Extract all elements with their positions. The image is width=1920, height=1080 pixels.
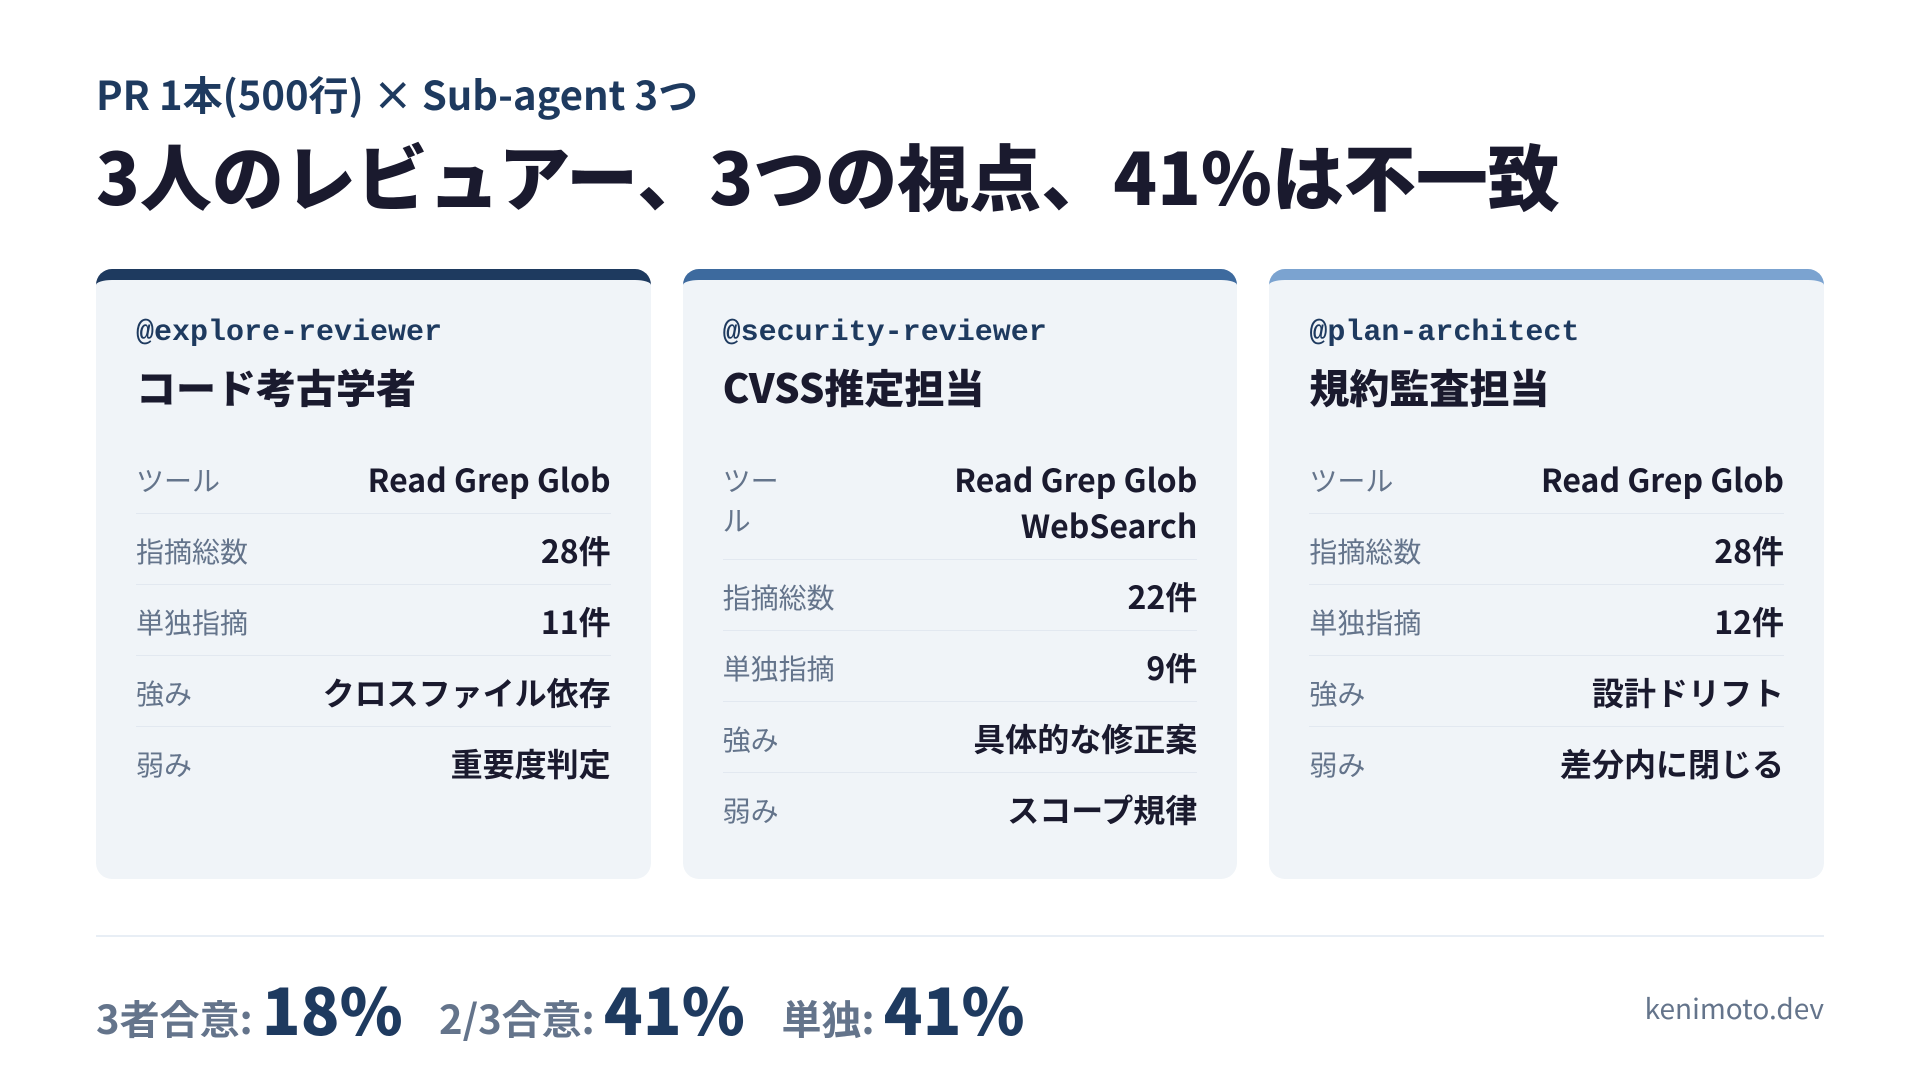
row: weakness bbox=[136, 740, 611, 786]
row: tools: Read Grep Glob bbox=[1541, 456, 1784, 502]
row: solo findings: 11件 bbox=[541, 598, 611, 644]
row: weakness: 重要度判定 bbox=[451, 740, 611, 786]
row: strength: クロスファイル依存 bbox=[323, 669, 611, 715]
row: tools bbox=[1309, 443, 1784, 514]
stat: solo: 単独: 41% bbox=[782, 962, 1025, 1054]
role heading: CVSS推定担当 bbox=[723, 357, 984, 415]
agent handle: @security-reviewer bbox=[723, 316, 1047, 350]
panel: plan-architect bbox=[1269, 269, 1824, 879]
agent handle: @explore-reviewer bbox=[136, 316, 442, 350]
row: solo findings bbox=[723, 631, 1197, 702]
row: solo findings: 単独指摘 bbox=[723, 648, 835, 688]
row: tools: Read Grep Glob bbox=[954, 456, 1197, 502]
row: solo findings: 単独指摘 bbox=[1309, 602, 1421, 642]
row: total findings: 指摘総数 bbox=[1309, 531, 1421, 571]
agent handle: @plan-architect bbox=[1309, 316, 1579, 350]
row: total findings: 28件 bbox=[541, 527, 611, 573]
row: total findings bbox=[136, 514, 611, 585]
row: tools: WebSearch bbox=[1021, 502, 1197, 548]
row: strength: 強み bbox=[723, 719, 779, 759]
row: total findings: 指摘総数 bbox=[723, 577, 835, 617]
row: weakness: 弱み bbox=[1309, 744, 1365, 784]
title: 3人のレビュアー、3つの視点、41%は不一致 bbox=[96, 121, 1560, 226]
stat: two of three agreement: 2/3合意: 41% bbox=[439, 962, 745, 1054]
row: solo findings: 9件 bbox=[1146, 644, 1197, 690]
row: weakness: 弱み bbox=[723, 790, 779, 830]
row: strength: 具体的な修正案 bbox=[973, 715, 1197, 761]
row: strength bbox=[723, 702, 1197, 773]
row: total findings: 指摘総数 bbox=[136, 531, 248, 571]
row: strength: 強み bbox=[1309, 673, 1365, 713]
row: weakness: 差分内に閉じる bbox=[1560, 740, 1784, 786]
row: strength: 設計ドリフト bbox=[1592, 669, 1784, 715]
row: strength bbox=[136, 656, 611, 727]
row: total findings: 28件 bbox=[1714, 527, 1784, 573]
row: tools: Read Grep Glob bbox=[368, 456, 611, 502]
row: solo findings bbox=[1309, 585, 1784, 656]
row: solo findings bbox=[136, 585, 611, 656]
panel: security-reviewer bbox=[683, 269, 1237, 879]
row: tools: ツール bbox=[723, 460, 779, 540]
row: tools bbox=[723, 443, 1197, 560]
subtitle: PR 1本(500行) × Sub-agent 3つ bbox=[96, 64, 698, 122]
row: total findings bbox=[723, 560, 1197, 631]
row: weakness: スコープ規律 bbox=[1007, 786, 1197, 832]
row: strength bbox=[1309, 656, 1784, 727]
row: tools: ツール bbox=[1309, 460, 1393, 500]
role heading: 規約監査担当 bbox=[1309, 357, 1549, 415]
row: solo findings: 12件 bbox=[1714, 598, 1784, 644]
site credit: kenimoto.dev bbox=[1645, 988, 1824, 1028]
row: weakness bbox=[723, 786, 1197, 832]
row: total findings: 22件 bbox=[1128, 573, 1197, 619]
row: solo findings: 単独指摘 bbox=[136, 602, 248, 642]
row: strength: 強み bbox=[136, 673, 192, 713]
row: total findings bbox=[1309, 514, 1784, 585]
role heading: コード考古学者 bbox=[136, 357, 416, 415]
row: weakness: 弱み bbox=[136, 744, 192, 784]
stat: three-way agreement: 3者合意: 18% bbox=[96, 962, 403, 1054]
row: weakness bbox=[1309, 740, 1784, 786]
panel: explore-reviewer bbox=[96, 269, 651, 879]
row: tools: ツール bbox=[136, 460, 220, 500]
footer divider bbox=[96, 935, 1824, 937]
row: tools bbox=[136, 443, 611, 514]
